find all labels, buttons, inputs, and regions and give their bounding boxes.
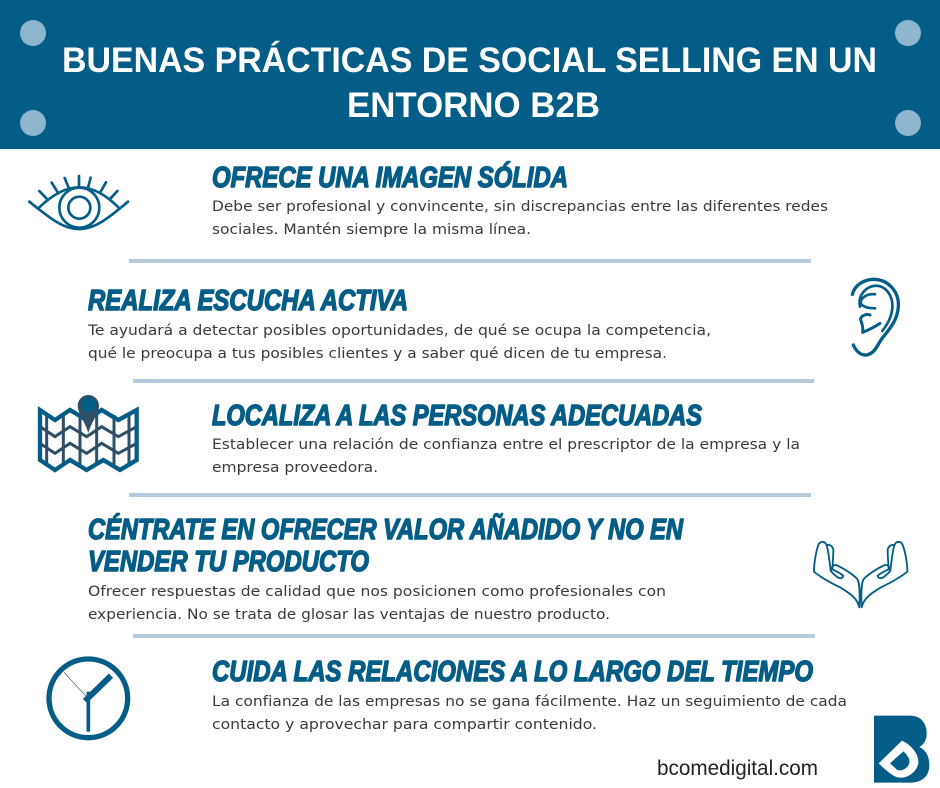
body text: Ofrecer respuestas de calidad que nos posicionen como profesionales con bbox=[88, 584, 666, 600]
section 2: active listening bbox=[87, 285, 711, 362]
icon: clock bbox=[49, 659, 128, 738]
logo: B with drop bbox=[874, 716, 929, 783]
body text bbox=[212, 694, 847, 733]
section 3: right people bbox=[212, 400, 800, 476]
heading: REALIZA ESCUCHA ACTIVA bbox=[88, 285, 408, 317]
body text bbox=[212, 437, 800, 476]
icon: eye bbox=[29, 176, 128, 229]
website label: bcomedigital.com bbox=[657, 757, 818, 780]
body text: empresa proveedora. bbox=[212, 460, 378, 476]
body text: experiencia. No se trata de glosar las ventajas de nuestro producto. bbox=[88, 607, 610, 623]
body text: Te ayudará a detectar posibles oportunidades, de qué se ocupa la competencia, bbox=[87, 323, 711, 339]
section 5: relationships over time bbox=[212, 656, 847, 733]
title: ENTORNO B2B bbox=[347, 86, 600, 125]
body text: La confianza de las empresas no se gana fácilmente. Haz un seguimiento de cada bbox=[212, 694, 847, 710]
heading: CUIDA LAS RELACIONES A LO LARGO DEL TIEMPO bbox=[212, 656, 813, 688]
icon: open hands bbox=[814, 542, 907, 607]
heading: OFRECE UNA IMAGEN SÓLIDA bbox=[212, 160, 568, 194]
section 1: solid image bbox=[212, 160, 828, 238]
section 4: added value bbox=[88, 512, 684, 623]
title bbox=[62, 40, 877, 125]
icon: map with pin bbox=[40, 395, 137, 470]
header banner bbox=[0, 0, 940, 149]
body text bbox=[88, 584, 666, 623]
heading: VENDER TU PRODUCTO bbox=[88, 546, 369, 578]
icon: ear bbox=[852, 279, 898, 355]
icon: location pin bbox=[78, 395, 99, 433]
body text bbox=[87, 323, 711, 362]
body text: Establecer una relación de confianza entre el prescriptor de la empresa y la bbox=[212, 437, 800, 453]
title: BUENAS PRÁCTICAS DE SOCIAL SELLING EN UN bbox=[62, 40, 877, 80]
heading: LOCALIZA A LAS PERSONAS ADECUADAS bbox=[212, 400, 703, 432]
heading: CÉNTRATE EN OFRECER VALOR AÑADIDO Y NO EN bbox=[88, 512, 684, 546]
body text: qué le preocupa a tus posibles clientes y a saber qué dicen de tu empresa. bbox=[88, 346, 667, 362]
body text: contacto y aprovechar para compartir contenido. bbox=[212, 717, 597, 733]
body text: sociales. Mantén siempre la misma línea. bbox=[212, 222, 531, 238]
body text bbox=[212, 199, 828, 238]
body text: Debe ser profesional y convincente, sin discrepancias entre las diferentes redes bbox=[212, 199, 828, 215]
heading bbox=[88, 512, 684, 578]
